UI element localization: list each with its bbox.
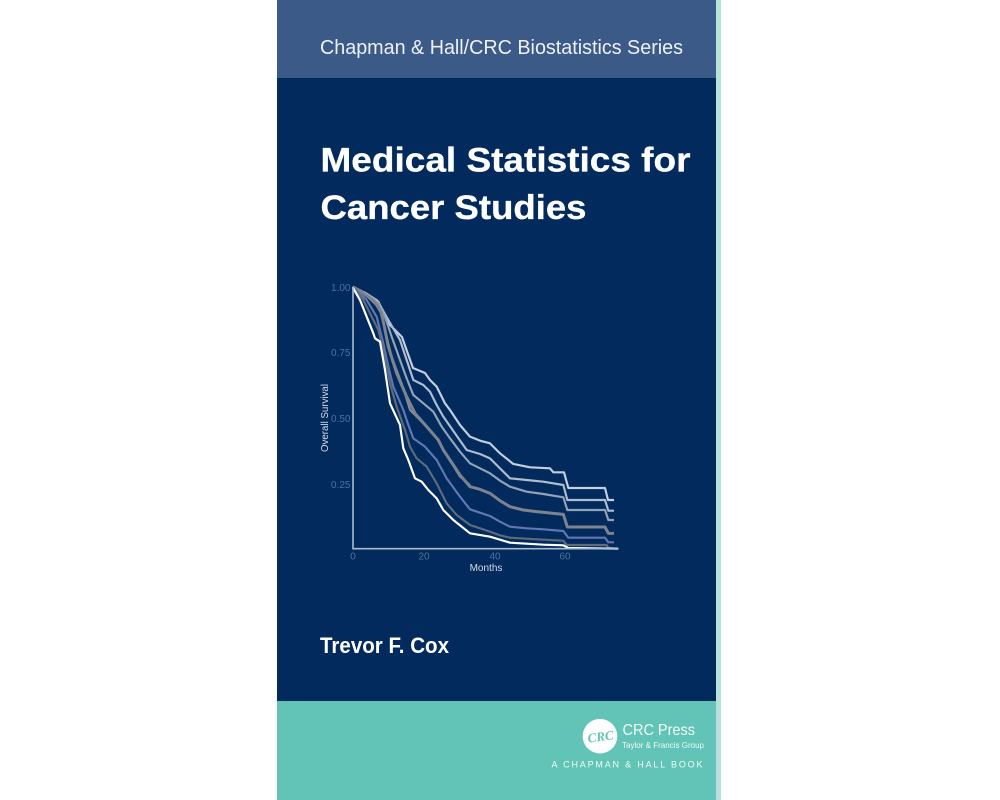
imprint line: A CHAPMAN & HALL BOOK — [552, 760, 702, 770]
panel: teal publisher band — [277, 701, 716, 800]
series title: Chapman & Hall/CRC Biostatistics Series — [320, 37, 683, 59]
x axis tick labels: 0 — [350, 552, 356, 562]
panel: right edge strip — [716, 0, 721, 800]
y axis tick labels: 1.00 — [331, 283, 351, 294]
chart: overall survival curves — [320, 283, 618, 574]
panel: navy cover background — [277, 0, 716, 800]
y axis title: Overall Survival — [320, 384, 331, 452]
panel: book cover — [277, 0, 721, 800]
heading: book title — [320, 142, 690, 227]
x axis tick labels — [350, 552, 571, 562]
y axis tick labels: 0.50 — [331, 414, 351, 425]
publisher group: Taylor & Francis Group — [622, 740, 704, 750]
x axis tick labels: 60 — [559, 552, 571, 562]
icon: CRC logo circle — [583, 719, 617, 754]
survival curve lines — [353, 287, 618, 549]
heading: book title: Medical Statistics for — [320, 142, 690, 180]
x axis tick labels: 40 — [489, 552, 501, 562]
y axis tick labels: 0.75 — [331, 348, 351, 359]
author name: Trevor F. Cox — [320, 633, 450, 658]
heading: book title: Cancer Studies — [320, 189, 586, 227]
publisher name: CRC Press — [622, 722, 695, 739]
x axis tick labels: 20 — [418, 552, 430, 562]
chart axes — [353, 287, 618, 549]
y axis tick labels — [331, 283, 351, 491]
panel: series header band — [277, 0, 716, 78]
icon: CRC logo circle: CRC — [587, 727, 615, 746]
x axis title: Months — [470, 563, 502, 574]
y axis tick labels: 0.25 — [331, 480, 351, 491]
